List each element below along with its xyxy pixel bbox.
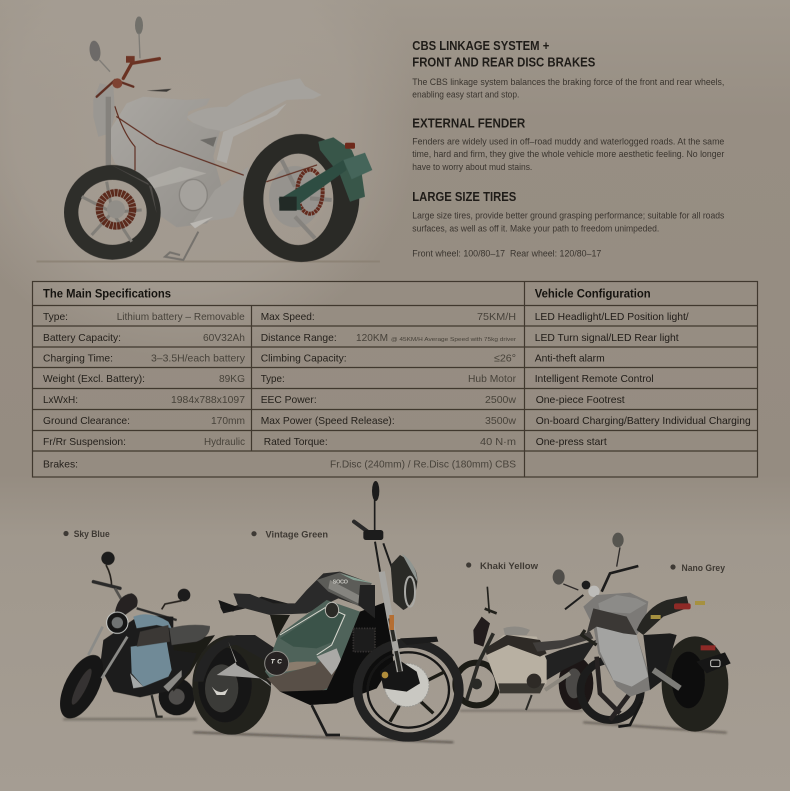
feature: CBS linkage: FRONT AND REAR DISC BRAKES (412, 56, 595, 70)
vehicle configuration column: On-board Charging/Battery Individual Charging (536, 415, 751, 427)
main specifications column 2: 3500w (485, 415, 516, 427)
main specifications column 1: Hydraulic (204, 436, 245, 448)
brake lines and handlebar (97, 56, 317, 182)
main specifications column 2: Max Power (Speed Release): (261, 415, 395, 427)
vehicle configuration column: Anti-theft alarm (535, 352, 605, 364)
rear wheel (243, 134, 359, 262)
label: khaki yellow: Khaki Yellow (480, 561, 539, 572)
vehicle configuration column: One-press start (536, 436, 607, 448)
label: nano grey: Nano Grey (682, 563, 726, 574)
vehicle configuration column: LED Turn signal/LED Rear light (535, 332, 679, 344)
main specifications column 1: 170mm (211, 415, 245, 427)
main specifications column 1: 89KG (219, 373, 245, 385)
main specifications column 1: Battery Capacity: (43, 332, 121, 344)
main specifications column 2 (261, 311, 516, 448)
feature: large size tires: LARGE SIZE TIRES (412, 190, 516, 204)
feature: large size tires: surfaces, as well as off it. Make your path to freedom unimpeded. (412, 224, 659, 234)
vehicle configuration column (535, 288, 751, 448)
main specifications column 1: 60V32Ah (203, 332, 245, 344)
feature: large size tires: Large size tires, provide better ground grasping performance; suitable for all roads (412, 211, 725, 221)
motorcycle: sky blue (51, 552, 215, 725)
main specifications column 2: EEC Power: (261, 394, 317, 406)
feature: external fender (412, 117, 724, 172)
main specifications column 1: Lithium battery – Removable (117, 311, 245, 323)
feature: large size tires: Front wheel: 100/80–17 Rear wheel: 120/80–17 (412, 249, 601, 259)
main specifications column 1: 3–3.5H/each battery (151, 352, 246, 364)
feature text column (412, 39, 725, 259)
main specifications column 1: Charging Time: (43, 352, 113, 364)
specifications table (32, 281, 758, 477)
main specifications column 1: Type: (43, 311, 68, 323)
feature: external fender: have to worry about mud stains. (412, 162, 532, 172)
main specifications column 1: Fr.Disc (240mm) / Re.Disc (180mm) CBS (330, 458, 516, 470)
main specifications column 1: LxWxH: (43, 394, 78, 406)
color labels (63, 529, 726, 574)
main specifications column 2: 40 N·m (480, 436, 516, 448)
main specifications column 1: 1984x788x1097 (171, 394, 245, 406)
feature: large size tires (412, 190, 725, 259)
main specifications column 1: Weight (Excl. Battery): (43, 373, 145, 385)
motorcycle: khaki yellow (455, 587, 597, 711)
feature: external fender: EXTERNAL FENDER (412, 117, 525, 131)
motorcycle: vintage green: SOCO (333, 580, 349, 586)
main specifications column 2: ≤26° (494, 352, 516, 364)
vehicle configuration column: Vehicle Configuration (535, 288, 651, 300)
main specifications column 2: Rated Torque: (264, 436, 328, 448)
kickstand (165, 217, 213, 260)
feature: external fender: Fenders are widely used in off–road muddy and waterlogged roads. At the same (412, 136, 724, 146)
vehicle configuration column: One-piece Footrest (536, 394, 625, 406)
main specifications column 2: @ 45KM/H Average Speed with 75kg driver (391, 337, 516, 343)
motorcycle: vintage green (192, 481, 459, 742)
main specifications column 2: Max Speed: (261, 311, 315, 323)
main specifications column 2: 120KM (356, 332, 388, 344)
main specifications column 1: Brakes: (43, 458, 78, 470)
vehicle configuration column: Intelligent Remote Control (535, 373, 654, 385)
main specifications column 1: The Main Specifications (43, 288, 171, 300)
main specifications column 2: 2500w (485, 394, 516, 406)
main specifications column 1: Fr/Rr Suspension: (43, 436, 126, 448)
main specifications column 2: Type: (261, 373, 285, 385)
feature: CBS linkage (412, 39, 724, 100)
body shell (93, 78, 322, 227)
front wheel (64, 163, 161, 260)
vehicle configuration column: LED Headlight/LED Position light/ (535, 311, 689, 323)
ground line (37, 260, 380, 262)
main specifications column 2: Hub Motor (468, 373, 516, 385)
illustration: translucent motorcycle with brake system and fender (37, 16, 380, 262)
feature: CBS linkage: CBS LINKAGE SYSTEM + (412, 39, 549, 53)
green fender (279, 137, 372, 211)
feature: CBS linkage: enabling easy start and stop. (412, 90, 519, 100)
label: sky blue: Sky Blue (74, 529, 110, 540)
main specifications column 1 (43, 288, 516, 470)
feature: external fender: time, hard and firm, they give the whole vehicle more aesthetic feeling. No longer (412, 149, 724, 159)
main specifications column 1: Ground Clearance: (43, 415, 130, 427)
main specifications column 2: Distance Range: (261, 332, 337, 344)
motorcycle: vintage green: TC (271, 658, 282, 665)
mirrors (88, 16, 143, 72)
feature: CBS linkage: The CBS linkage system balances the braking force of the front and rear wheels, (412, 77, 724, 87)
main specifications column 2: 75KM/H (477, 311, 516, 323)
motorcycle: nano grey (553, 533, 731, 733)
main specifications column 2: Climbing Capacity: (261, 352, 347, 364)
label: vintage green: Vintage Green (266, 530, 328, 540)
